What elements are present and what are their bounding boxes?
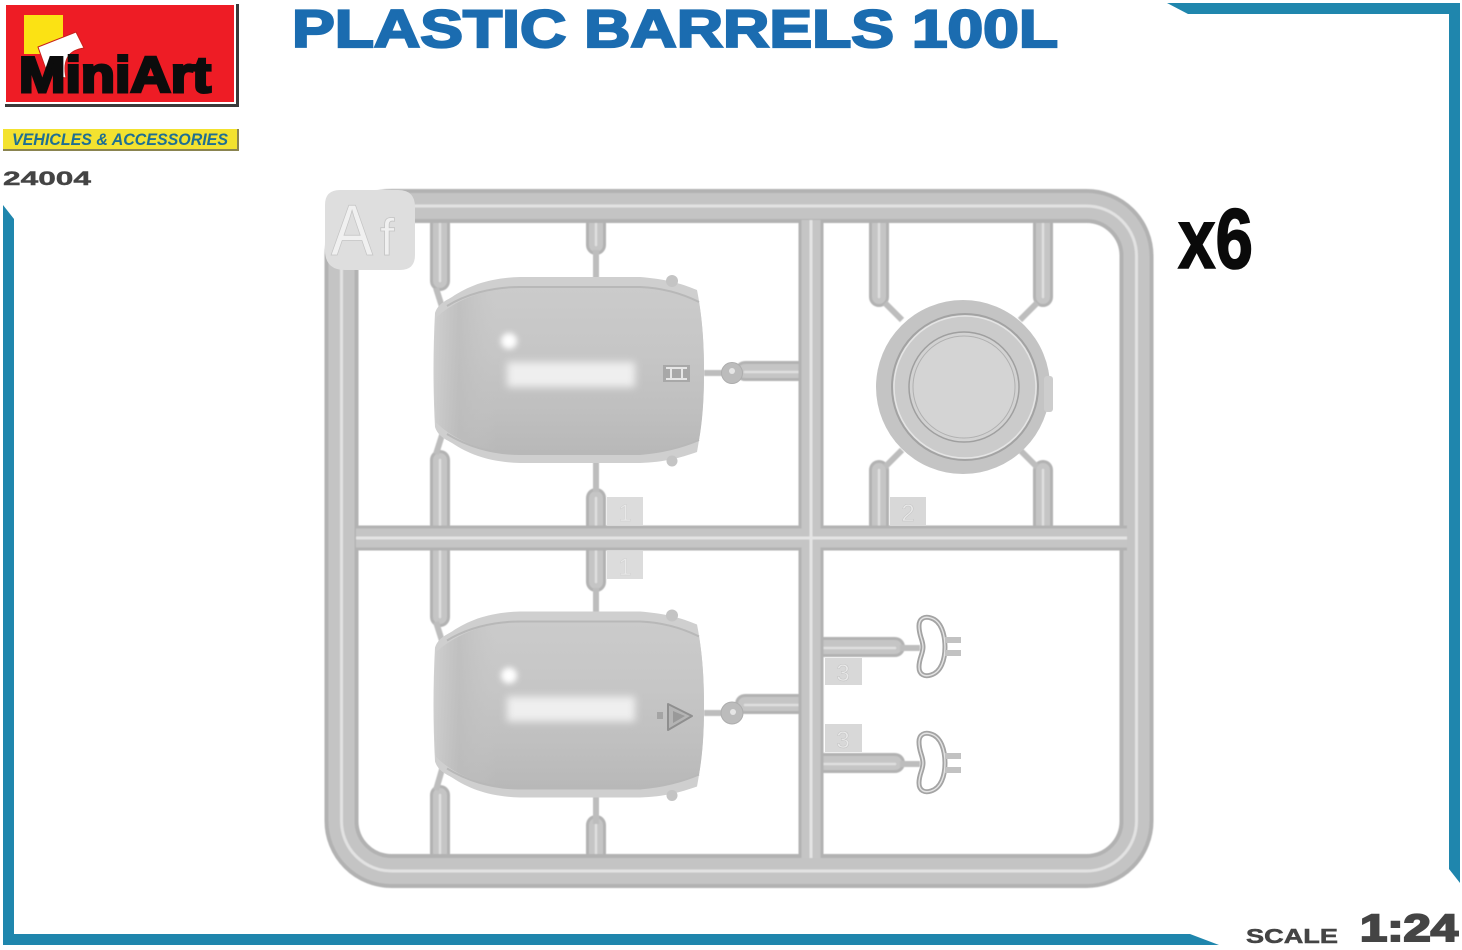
scale value: 1:24 xyxy=(1360,908,1458,950)
barrel part 1 lower xyxy=(434,610,743,801)
quantity x6: x6 xyxy=(1178,192,1253,287)
ball gate xyxy=(722,362,742,384)
blue frame: top and right corner xyxy=(1167,3,1460,883)
MiniArt logo xyxy=(5,4,239,107)
blue frame: left and bottom corner xyxy=(3,205,1219,945)
part number tag 1 lower xyxy=(607,551,643,581)
part number tag 2 xyxy=(890,497,926,527)
MiniArt logo: MiniArt xyxy=(19,47,211,103)
title: PLASTIC BARRELS 100L xyxy=(292,0,1058,59)
embossed arrows mark xyxy=(663,365,690,382)
key part 3 lower xyxy=(919,733,961,792)
runner tag Af: A xyxy=(331,191,373,271)
part number tag 3 upper xyxy=(825,658,862,687)
feed stubs xyxy=(440,215,1043,862)
runner tag Af xyxy=(325,190,415,271)
part number tag 3 lower xyxy=(825,724,862,754)
inner runners xyxy=(356,220,1127,858)
part number tag 3 lower: 3 xyxy=(836,727,850,754)
runner tag Af: f xyxy=(380,209,395,267)
scale label: SCALE xyxy=(1246,926,1338,948)
sprue frame xyxy=(342,206,1136,871)
part number tag 3 upper: 3 xyxy=(836,660,850,687)
embossed triangle mark xyxy=(657,704,692,730)
gates xyxy=(436,250,1037,824)
part number tag 2: 2 xyxy=(901,500,915,527)
product code: 24004 xyxy=(3,168,91,190)
part number tag 1 lower: 1 xyxy=(618,554,632,581)
part number tag 1 upper xyxy=(607,497,643,527)
barrel lid part 2 xyxy=(876,300,1053,474)
key part 3 upper xyxy=(919,617,961,676)
barrel part 1 upper xyxy=(434,275,742,466)
ball gate xyxy=(721,702,743,724)
badge: vehicles and accessories: VEHICLES & ACCESSORIES xyxy=(12,131,228,149)
part number tag 1 upper: 1 xyxy=(618,500,632,527)
outer runner xyxy=(342,206,1136,871)
